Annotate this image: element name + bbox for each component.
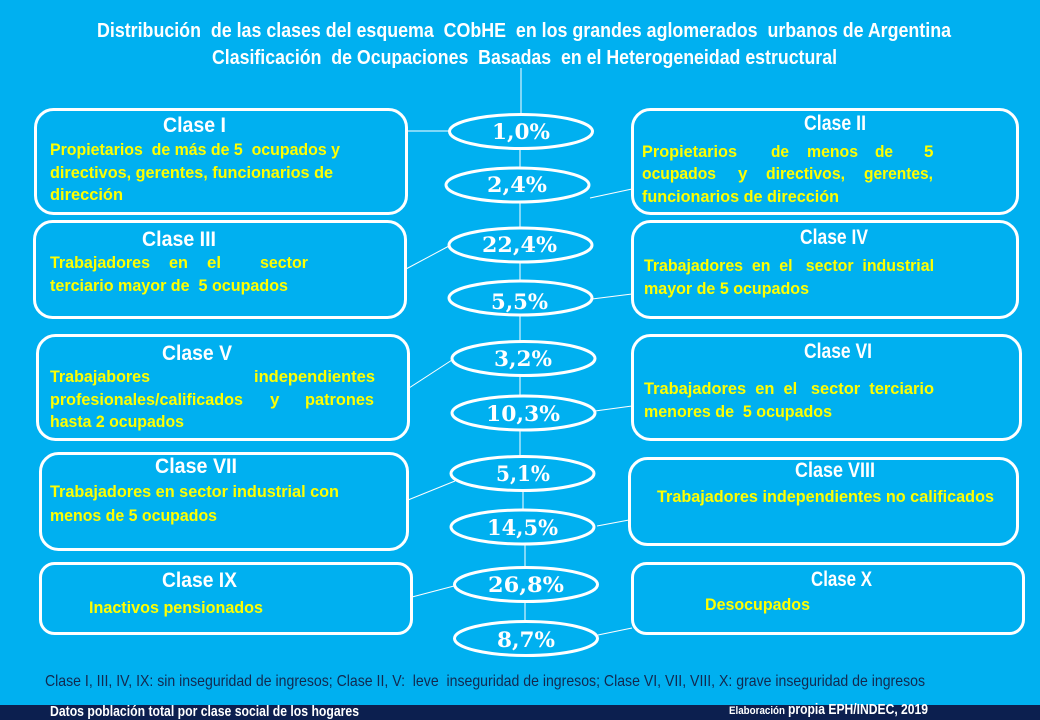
panel: Clase II <box>632 110 1018 214</box>
ellipse: Clase IX 26,8% <box>454 568 598 602</box>
panel: Clase II: ocupados <box>642 164 716 183</box>
panel: Clase III: sector <box>260 253 308 272</box>
ellipse: Clase III 22,4%: 22,4% <box>482 232 557 257</box>
panel: Clase V: Clase V <box>162 342 232 365</box>
panel: Clase III <box>34 222 406 318</box>
panel: Clase VIII <box>630 458 1018 544</box>
panel: Clase II: de <box>875 142 893 161</box>
panel: Clase V: patrones <box>305 390 374 409</box>
ellipse: Clase IX 26,8%: 26,8% <box>488 572 564 597</box>
panel: Clase III: el <box>207 253 221 272</box>
panel: Clase II: Propietarios <box>642 142 737 161</box>
panel: Clase X: Clase X <box>811 568 872 591</box>
ellipse: Clase V 3,2% <box>452 342 595 376</box>
ellipse: Clase VI 10,3% <box>452 396 595 430</box>
panel: Clase X <box>632 564 1024 634</box>
panel: Clase X: Desocupados <box>705 595 810 614</box>
panel: Clase I: directivos, gerentes, funcionarios de <box>50 163 333 182</box>
panel: Clase II: y <box>738 164 748 183</box>
panel: Clase VII <box>40 454 408 550</box>
panel: Clase IX: Clase IX <box>162 569 237 592</box>
panel: Clase VI <box>632 336 1020 440</box>
ellipse: Clase II 2,4%: 2,4% <box>487 172 547 197</box>
panel: Clase V: Trabajabores <box>50 367 150 386</box>
ellipse: Clase IV 5,5% <box>449 281 592 315</box>
panel: Clase I: dirección <box>50 185 123 204</box>
panel: Clase IV <box>632 222 1018 318</box>
connector lines <box>406 68 632 635</box>
panel: Clase V: independientes <box>254 367 375 386</box>
panel: Clase V <box>38 336 408 440</box>
panel: Clase VIII: Trabajadores independientes no calificados <box>657 487 994 506</box>
panel: Clase IV: mayor de 5 ocupados <box>644 279 809 298</box>
panel: Clase II: directivos, <box>766 164 845 183</box>
ellipse: Clase V 3,2%: 3,2% <box>494 346 552 371</box>
footer bar: Datos población total por clase social de los hogares <box>50 703 359 720</box>
panel: Clase III: Trabajadores <box>50 253 150 272</box>
footer bar: Elaboración <box>729 705 785 717</box>
ellipse: Clase VII 5,1% <box>451 456 594 490</box>
panel: Clase I: Clase I <box>163 114 226 137</box>
panel: Clase I: Propietarios de más de 5 ocupados y <box>50 140 340 159</box>
panel: Clase V: y <box>270 390 280 409</box>
panel: Clase V: hasta 2 ocupados <box>50 412 184 431</box>
panel: Clase II: funcionarios de dirección <box>642 187 839 206</box>
ellipse: Clase VI 10,3%: 10,3% <box>486 401 560 426</box>
panel: Clase II: Clase II <box>804 112 866 135</box>
panel: Clase I <box>36 110 406 214</box>
title <box>97 20 952 69</box>
panel: Clase VII: Trabajadores en sector industrial con <box>50 482 339 501</box>
panel: Clase III: terciario mayor de 5 ocupados <box>50 276 288 295</box>
footer bar <box>0 701 1040 720</box>
legend note: Clase I, III, IV, IX: sin inseguridad de ingresos; Clase II, V: leve inseguridad de ingresos; Clase VI, VII, VIII, X: grave inseguridad de ingresos <box>45 673 925 690</box>
percentage ellipses <box>446 114 598 656</box>
footer bar: propia EPH/INDEC, 2019 <box>788 701 928 718</box>
ellipse: Clase I 1,0%: 1,0% <box>492 119 550 144</box>
panel: Clase II: de <box>771 142 789 161</box>
ellipse: Clase X 8,7%: 8,7% <box>497 627 555 652</box>
panel: Clase II: 5 <box>924 142 933 161</box>
panel: Clase VI: Clase VI <box>804 340 872 363</box>
panel: Clase VII: Clase VII <box>155 455 237 478</box>
panel: Clase IV: Clase IV <box>800 226 868 249</box>
panel: Clase III: en <box>169 253 188 272</box>
panel: Clase V: profesionales/calificados <box>50 390 243 409</box>
panel: Clase II: menos <box>807 142 858 161</box>
panel: Clase VII: menos de 5 ocupados <box>50 506 217 525</box>
panel: Clase IX <box>40 564 412 634</box>
panel: Clase IX: Inactivos pensionados <box>89 598 263 617</box>
ellipse: Clase VIII 14,5% <box>451 510 594 544</box>
ellipse: Clase III 22,4% <box>449 228 592 262</box>
ellipse: Clase VII 5,1%: 5,1% <box>496 461 550 486</box>
panel: Clase VIII: Clase VIII <box>795 459 875 482</box>
panel: Clase VI: menores de 5 ocupados <box>644 402 832 421</box>
ellipse: Clase X 8,7% <box>454 622 598 656</box>
panel: Clase II: gerentes, <box>864 164 933 183</box>
title: Distribución de las clases del esquema CObHE en los grandes aglomerados urbanos de Argentina <box>97 20 952 42</box>
ellipse: Clase I 1,0% <box>450 114 592 148</box>
panel: Clase VI: Trabajadores en el sector terciario <box>644 379 934 398</box>
panel: Clase IV: Trabajadores en el sector industrial <box>644 256 934 275</box>
panel: Clase III: Clase III <box>142 228 216 251</box>
ellipse: Clase IV 5,5%: 5,5% <box>491 289 548 314</box>
ellipse: Clase II 2,4% <box>446 168 589 202</box>
title: Clasificación de Ocupaciones Basadas en el Heterogeneidad estructural <box>212 47 837 69</box>
ellipse: Clase VIII 14,5%: 14,5% <box>487 515 558 540</box>
